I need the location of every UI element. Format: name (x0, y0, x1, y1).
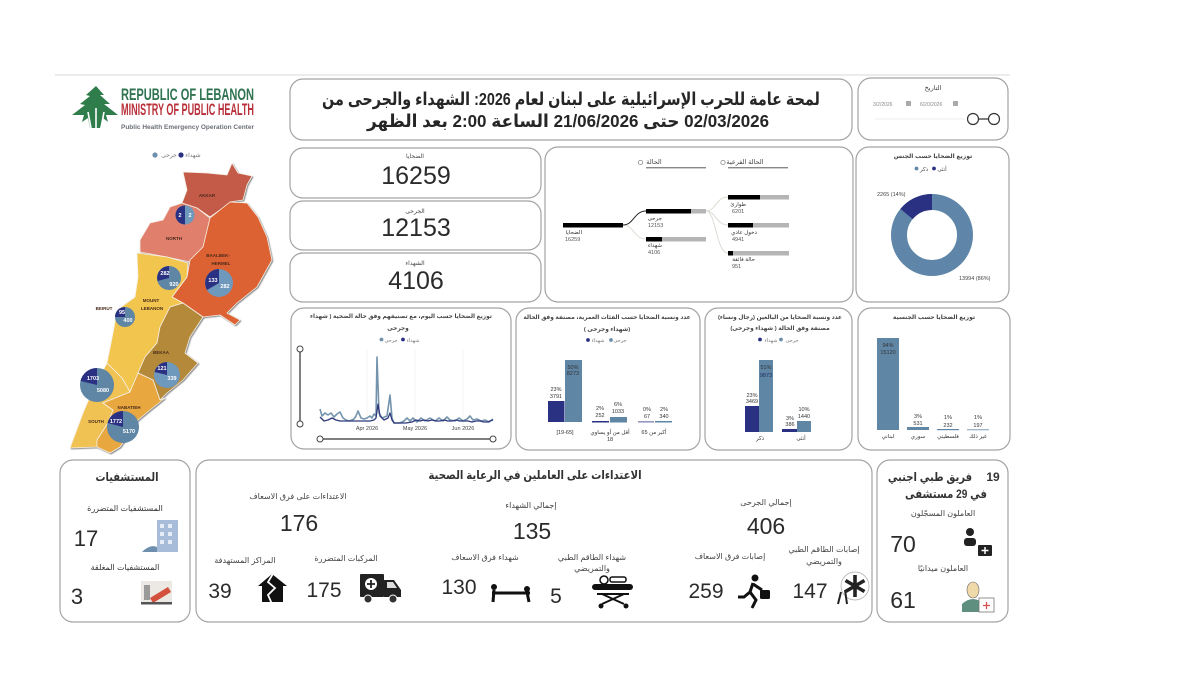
foreign team heading: فريق طبي اجنبي (888, 471, 972, 484)
adult bars: female: أنثى (796, 434, 806, 442)
stat: damaged vehicles: المركبات المتضررة (314, 554, 378, 563)
age bars: under 18: أقل من أو يساوي (590, 428, 630, 436)
age bars: over 65: 340 (659, 414, 669, 420)
foreign team heading (888, 470, 1000, 501)
adult bars: female: 10% (798, 407, 810, 413)
stat: total martyrs: إجمالي الشهداء (505, 501, 557, 511)
age chart legend: شهداء (592, 338, 604, 344)
panel: nationality chart (858, 308, 1010, 450)
age bars: 19-65 (548, 360, 582, 436)
stat: ambulance martyrs: شهداء فرق الاسعاف (451, 553, 519, 562)
adult bars: male: 3469 (746, 399, 758, 405)
bar: Syrian: سوري (911, 434, 926, 440)
stat: targeted centers: 39 (208, 580, 232, 603)
tree bar: normal admission: دخول عادي (731, 230, 758, 236)
stat: medical staff injuries (788, 545, 860, 603)
pie: Beirut (115, 307, 135, 327)
pie: Beirut: 400 (123, 318, 133, 324)
bar: Palestinian: فلسطيني (937, 434, 959, 440)
stat: medical staff injuries: إصابات الطاقم الطبي (788, 545, 860, 555)
bar: Lebanese (877, 338, 899, 440)
icon: medical star person (838, 572, 869, 604)
line chart gridlines (367, 350, 463, 425)
x axis labels (356, 426, 474, 432)
pie: Mount Lebanon: 282 (160, 271, 170, 277)
logo: Ministry of Public Health (72, 86, 254, 131)
age bars: under 18: 1033 (612, 409, 624, 415)
stat: total wounded (740, 498, 792, 539)
age bars: under 18 (590, 402, 630, 443)
panel: adults by sex chart (705, 308, 852, 450)
icon: closed hospital (141, 581, 172, 604)
region: Bekaa (138, 303, 203, 400)
tree column header: status (638, 159, 706, 168)
stat: damaged vehicles: 175 (306, 579, 342, 602)
pie: Mount Lebanon (157, 266, 181, 290)
tree bar: critical condition: 951 (732, 264, 741, 270)
region labels: MOUNT (143, 298, 159, 303)
line chart heading: وجرحى (387, 326, 409, 332)
title line two: 02/03/2026 حتى 21/06/2026 الساعة 2:00 بعد الظهر (366, 111, 769, 132)
region labels (88, 193, 231, 424)
logo line: center name: Public Health Emergency Operation Center (121, 124, 254, 131)
field workers value: 61 (890, 587, 916, 613)
registered workers value: 70 (890, 531, 916, 557)
icon: ambulance (360, 574, 401, 603)
start date: 3/2/2026 (873, 102, 893, 108)
end date: 6/20/2026 (920, 102, 942, 108)
line chart legend: شهداء (407, 338, 419, 344)
region: Mount Lebanon (107, 253, 188, 392)
donut legend (915, 165, 947, 173)
region labels: HERMEL (212, 261, 231, 266)
damaged hospitals label: المستشفيات المتضررة (87, 504, 163, 513)
nationality heading: توزيع الضحايا حسب الجنسية (893, 314, 975, 321)
donut label: male: 13994 (86%) (959, 276, 991, 282)
bar: Palestinian: 1% (944, 415, 952, 421)
line series: martyrs (320, 404, 493, 423)
tree bar: martyrs (646, 237, 706, 256)
tree bar: normal admission (728, 223, 789, 243)
date heading: التاريخ (925, 85, 942, 92)
age bars: 19-65: 3791 (550, 394, 562, 400)
adults chart heading (718, 315, 842, 332)
field workers label: العاملون ميدانيًا (918, 564, 968, 573)
stat: attacks on ambulance teams: الاعتداءات على فرق الاسعاف (249, 492, 347, 501)
closed hospitals label: المستشفيات المغلقة (91, 563, 159, 572)
vertical range slider (297, 346, 303, 427)
line chart heading (310, 314, 492, 332)
bar: Lebanese: 94% (882, 343, 894, 349)
line chart legend (380, 338, 419, 344)
region: North (140, 203, 210, 262)
card: total wounded: 12153 (381, 214, 451, 242)
donut legend: أنثى (937, 165, 947, 173)
pie: Mount Lebanon: 920 (169, 282, 179, 288)
region labels: BEKAA (153, 350, 170, 355)
tree bar: emergency: طوارئ (730, 202, 746, 208)
age bars: under 18: 18 (607, 437, 613, 443)
tree bar: emergency (728, 195, 789, 215)
foreign team heading: في 29 مستشفى (905, 488, 987, 501)
card: total martyrs: 4106 (388, 267, 444, 295)
adult bars: male: 9873 (760, 373, 772, 379)
line chart legend: جرحى (384, 338, 398, 344)
bar: Lebanese: 15120 (880, 350, 896, 356)
bar: other: 1% (974, 415, 982, 421)
bar: Syrian: 3% (914, 414, 922, 420)
title line one: لمحة عامة للحرب الإسرائيلية على لبنان لعام 2026: الشهداء والجرحى من (322, 91, 820, 109)
stat: attacks on ambulance teams: 176 (280, 510, 318, 536)
pie: Bekaa: 121 (157, 366, 167, 372)
bar: other: غير ذلك (969, 434, 987, 440)
adult bars: female: 386 (785, 422, 795, 428)
bar: Syrian: 531 (913, 421, 923, 427)
tree bar: total: الضحايا (566, 230, 582, 236)
stat: medical staff martyrs: شهداء الطاقم الطبي (558, 553, 626, 562)
stat: total martyrs: 135 (513, 518, 551, 544)
region labels: NABATIEH (118, 405, 140, 410)
tree bar: critical condition (728, 251, 789, 270)
age bars: over 65: أكبر من 65 (641, 428, 667, 436)
region: Nabatieh (97, 373, 165, 453)
pie: North: 2 (178, 213, 182, 219)
region labels: LEBANON (141, 306, 163, 311)
donut label: female: 2265 (14%) (877, 192, 906, 198)
foreign team heading: 19 (986, 470, 1000, 484)
pie: North: 2 (188, 213, 192, 219)
stat: medical staff martyrs: والتمريضي (574, 564, 610, 573)
panel: daily line chart (291, 308, 511, 449)
age chart heading (523, 315, 691, 333)
panel: gender donut (856, 147, 1009, 302)
icon: medic with kit (964, 528, 992, 556)
region: South (70, 363, 130, 448)
title panel (290, 79, 852, 140)
pie: Baalbek-Hermel (205, 269, 233, 297)
tree bar: total (563, 223, 623, 243)
pie: Bekaa: 339 (167, 376, 177, 382)
closed hospitals value: 3 (71, 584, 83, 609)
logo line: ministry: MINISTRY OF PUBLIC HEALTH (121, 101, 254, 119)
icon: hospital gurney (592, 576, 633, 608)
x axis labels: Apr 2026 (356, 426, 378, 432)
adults chart heading: مصنفة وفق الحالة ( شهداء وجرحى) (730, 326, 830, 332)
bar: Palestinian (937, 415, 959, 440)
age bars: under 18: 2% (596, 406, 604, 412)
region labels: BEIRUT (96, 306, 113, 311)
region labels: AKKAR (199, 193, 216, 198)
pie: Nabatieh (107, 411, 139, 443)
tree bar: wounded: 12153 (648, 223, 663, 229)
age bars: over 65: 2% (660, 407, 668, 413)
icon: stretcher carriers (491, 584, 530, 602)
date range slider (968, 114, 1000, 124)
stat: ambulance injuries (688, 552, 765, 603)
panel: hospitals (60, 460, 190, 622)
adult bars: male: 23% (746, 393, 758, 399)
stat: targeted centers (208, 556, 276, 603)
tree bar: martyrs: 4106 (648, 250, 660, 256)
bar: other (967, 415, 989, 440)
bar: Palestinian: 232 (943, 423, 953, 429)
pie: Nabatieh: 1772 (110, 419, 122, 425)
adult bars: female: 1440 (798, 414, 810, 420)
line series: wounded (320, 357, 493, 423)
stat: targeted centers: المراكز المستهدفة (214, 556, 276, 565)
panel: age group chart (516, 308, 700, 450)
icon: field doctor with kit (962, 582, 994, 612)
tree bar: wounded (646, 209, 706, 229)
registered workers label: العاملون المسجّلون (911, 509, 975, 518)
region labels: SOUTH (88, 419, 104, 424)
x axis labels: Jun 2026 (452, 426, 474, 432)
age bars: over 65: 0% (643, 407, 651, 413)
stat: damaged vehicles (306, 554, 378, 602)
map legend: شهداء (185, 152, 201, 159)
donut legend: ذكر (919, 166, 929, 173)
stat: total wounded: إجمالي الجرحى (740, 498, 792, 508)
pie: Baalbek-Hermel: 133 (208, 278, 218, 284)
map legend: جرحى (161, 153, 177, 159)
tree bar: critical condition: حالة فائقة (732, 257, 755, 263)
date calendar icons (906, 101, 958, 106)
age bars: under 18: 252 (595, 413, 605, 419)
age chart legend (586, 338, 627, 344)
card: total wounded (290, 201, 541, 250)
pie: Nabatieh: 5170 (123, 429, 135, 435)
bar: Syrian (907, 414, 929, 440)
tree bar: martyrs: شهداء (648, 243, 662, 249)
tree column header: sub status: الحالة الفرعية (726, 159, 764, 166)
logo line: republic: REPUBLIC OF LEBANON (121, 86, 254, 104)
icon: running medic (738, 574, 770, 608)
card: total casualties: الضحايا (406, 153, 424, 160)
age bars: over 65 (638, 407, 672, 436)
map of Lebanon by governorate (70, 163, 272, 453)
donut heading: توزيع الضحايا حسب الجنس (894, 153, 972, 160)
region: Baalbek-Hermel (172, 202, 272, 325)
tree bar: emergency: 6201 (732, 209, 744, 215)
pie: Bekaa (154, 362, 180, 388)
age bars: 19-65: 8273 (567, 371, 579, 377)
pie: South (80, 368, 114, 402)
age chart heading: (شهداء وجرحى ) (584, 327, 630, 333)
attacks heading: الاعتداءات على العاملين في الرعاية الصحية (428, 469, 642, 482)
pie: Beirut: 95 (119, 310, 125, 316)
tree bar: wounded: جرحى (648, 216, 662, 222)
stat: total wounded: 406 (747, 513, 785, 539)
stat: medical staff injuries: والتمريضي (806, 557, 842, 566)
stat: ambulance injuries: إصابات فرق الاسعاف (695, 552, 765, 562)
age bars: 19-65: [19-65] (556, 430, 574, 436)
tree column header: sub status (721, 159, 788, 168)
age chart legend: جرحى (613, 338, 627, 344)
panel: decomposition tree (545, 147, 853, 302)
adult bars: female (782, 407, 811, 442)
adult bars: male: ذكر (755, 435, 765, 442)
pie: Baalbek-Hermel: 282 (220, 284, 230, 290)
pie: South: 1703 (87, 376, 99, 382)
age bars: 19-65: 50% (567, 365, 579, 371)
adults chart legend (758, 338, 799, 344)
region labels: BAALBEK- (206, 253, 230, 258)
age bars: over 65: 67 (644, 414, 650, 420)
hospitals heading: المستشفيات (95, 471, 159, 484)
region: Akkar (182, 163, 252, 217)
line chart heading: توزيع الضحايا حسب اليوم، مع تصنيفهم وفق حالة الضحية ( شهداء (310, 314, 492, 320)
card: total casualties (290, 148, 541, 198)
tree column header: status: الحالة (646, 159, 662, 166)
age bars: under 18: 6% (614, 402, 622, 408)
stat: total martyrs (505, 501, 557, 544)
stat: ambulance injuries: 259 (688, 580, 724, 603)
tree bar: normal admission: 4941 (732, 237, 744, 243)
pie: North (176, 206, 194, 224)
damaged hospitals value: 17 (74, 526, 98, 551)
icon: damaged hospital building (142, 520, 178, 552)
map legend (152, 152, 201, 159)
card: total martyrs (290, 253, 541, 302)
stat: medical staff martyrs (550, 553, 626, 608)
panel: attacks on health workers (196, 460, 872, 622)
horizontal range slider (317, 436, 496, 442)
adult bars: male: 51% (760, 365, 772, 371)
stat: ambulance martyrs (441, 553, 519, 599)
bar: other: 197 (973, 423, 983, 429)
panel: date slicer (858, 78, 1008, 140)
stat: medical staff martyrs: 5 (550, 585, 562, 608)
x axis labels: May 2026 (403, 426, 427, 432)
bar: Lebanese: لبناني (882, 434, 895, 440)
stat: ambulance martyrs: 130 (441, 576, 477, 599)
adult bars: male (745, 360, 773, 442)
tree bar: total: 16259 (565, 237, 580, 243)
region labels: NORTH (166, 236, 182, 241)
adult bars: female: 3% (786, 416, 794, 422)
card: total martyrs: الشهداء (405, 260, 425, 267)
icon: cedar tree (72, 86, 118, 128)
donut chart (899, 202, 965, 268)
pie: South: 5080 (97, 388, 109, 394)
adults chart legend: شهداء (765, 338, 777, 344)
age chart heading: عدد ونسبة الضحايا حسب الفئات العمرية، مصنفة وفق الحالة (523, 315, 691, 321)
card: total wounded: الجرحى (405, 208, 425, 215)
age bars: 19-65: 23% (550, 387, 562, 393)
stat: attacks on ambulance teams (249, 492, 347, 536)
adults chart heading: عدد ونسبة الضحايا من البالغين (رجال ونساء) (718, 315, 842, 321)
icon: broken house (258, 572, 287, 604)
card: total casualties: 16259 (381, 162, 451, 190)
stat: medical staff injuries: 147 (792, 580, 828, 603)
panel: foreign medical teams (877, 460, 1008, 622)
tree connectors (623, 197, 728, 253)
adults chart legend: جرحى (785, 338, 799, 344)
